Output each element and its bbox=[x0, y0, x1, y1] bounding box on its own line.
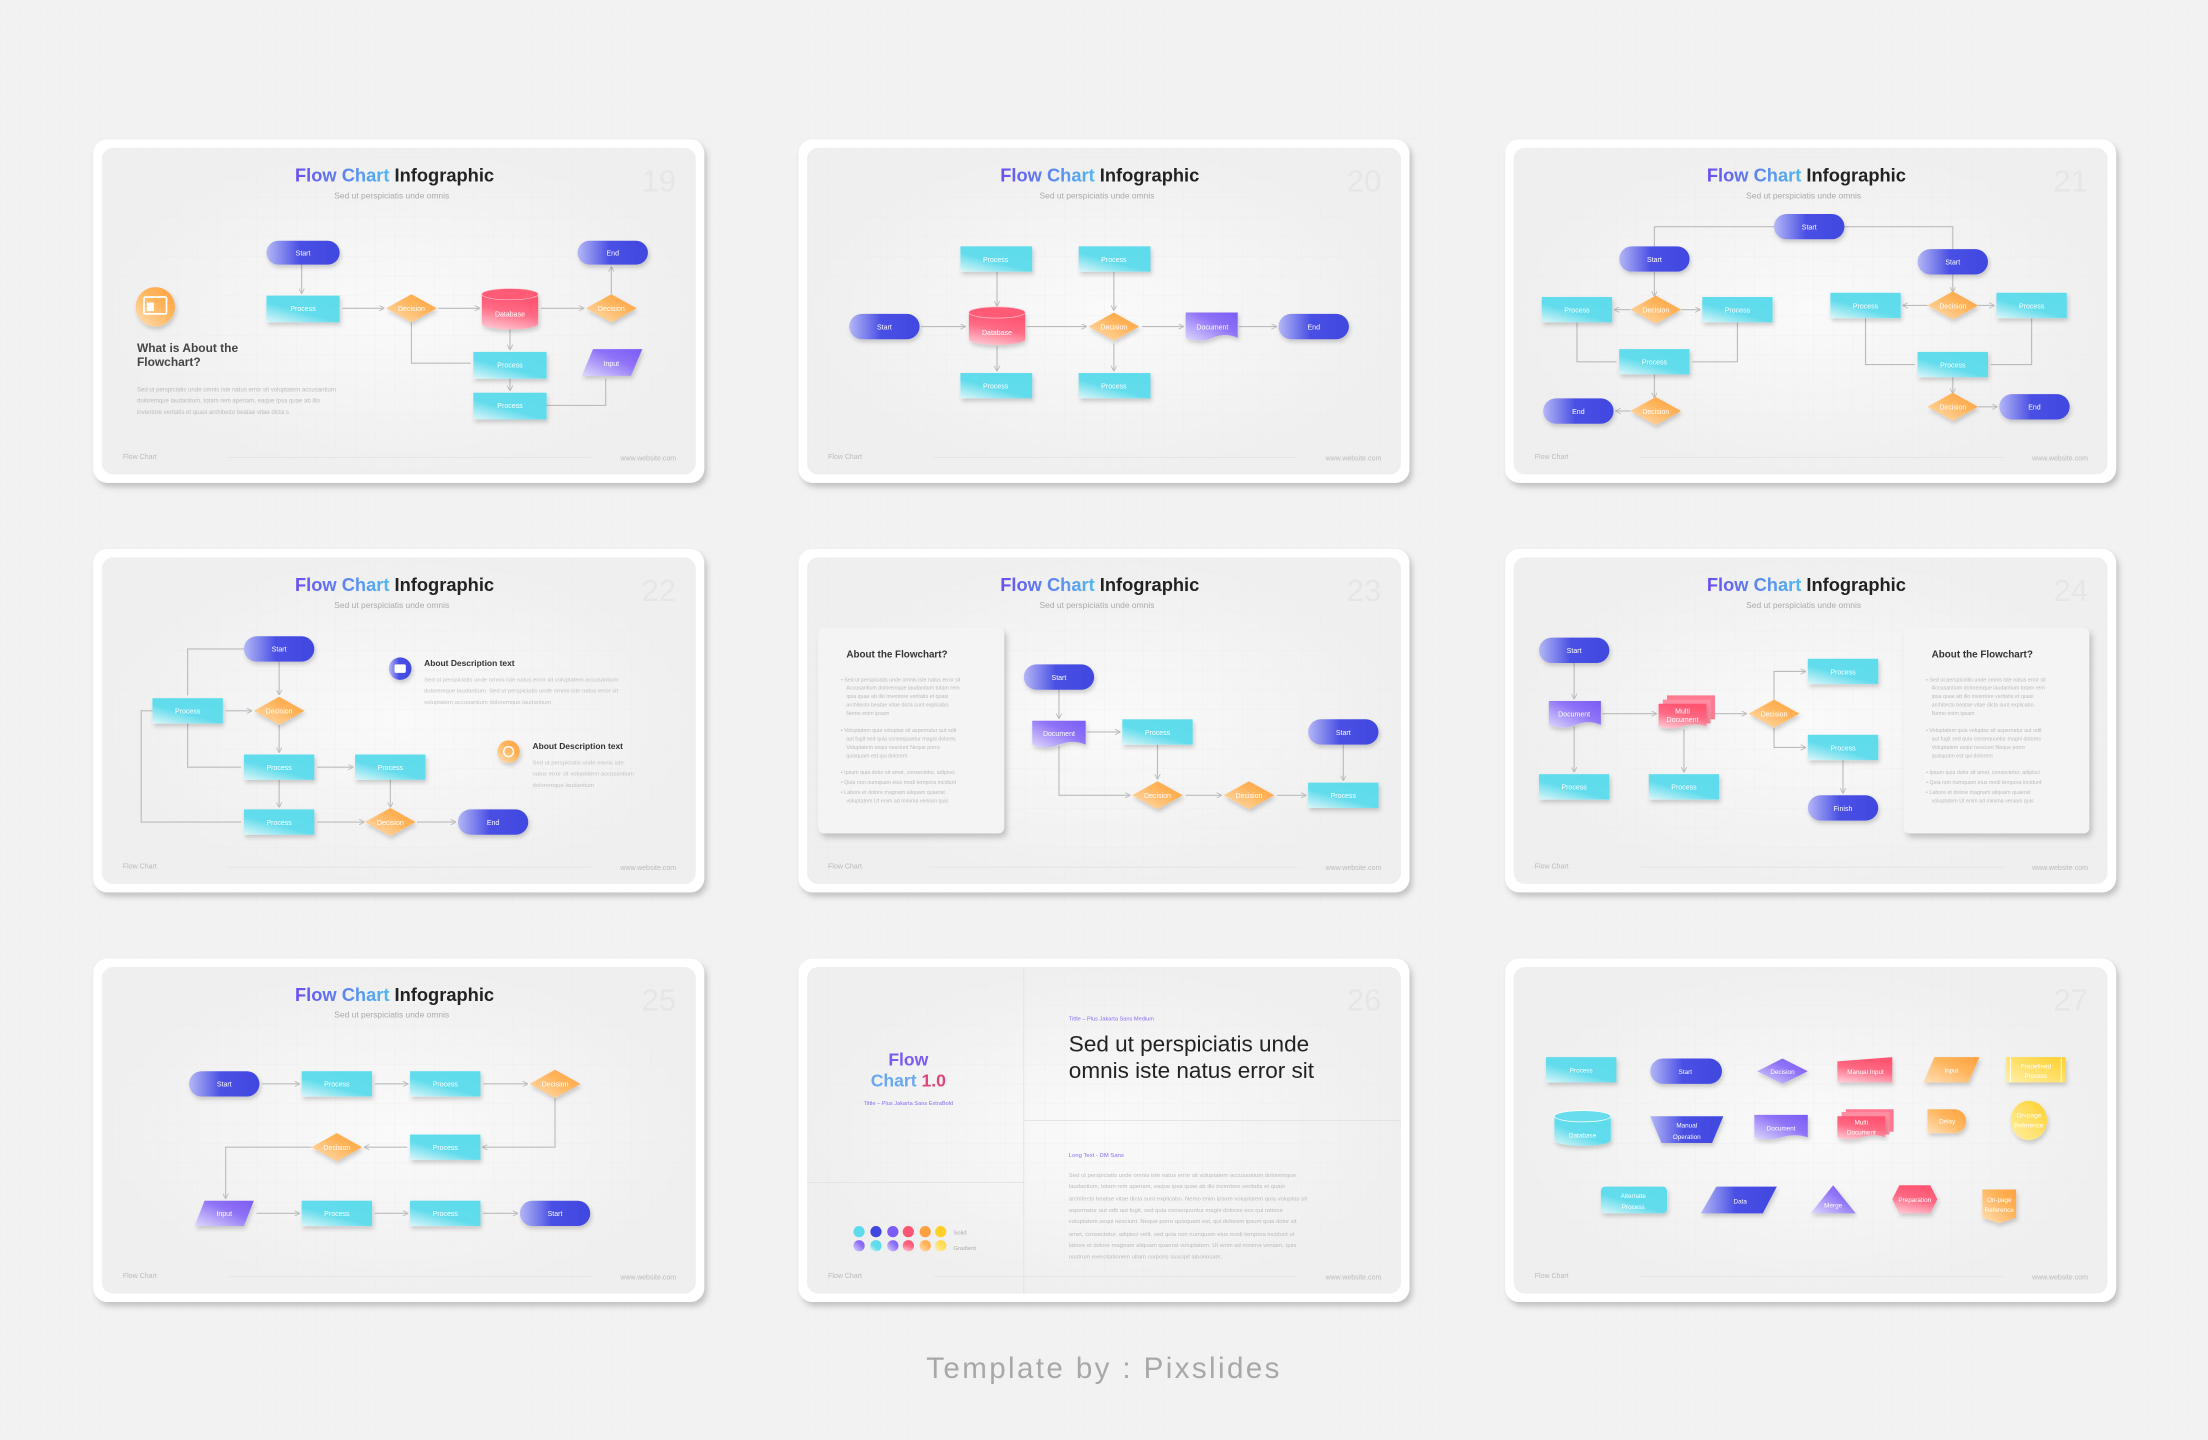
card 21 bbox=[1505, 139, 2116, 483]
panel: about bbox=[1904, 628, 2089, 833]
panel: about: • Sed ut perspiciatis unde omnis iste natus error sit bbox=[841, 677, 961, 683]
card 19: Flowchart? bbox=[137, 355, 201, 369]
panel: about: • Labore et dolore magnam aliquam quaerat bbox=[841, 790, 945, 796]
panel: about: aut fugit sed quia consequuntur magni dolores bbox=[846, 736, 956, 742]
flowchart shapes: Process bbox=[290, 306, 316, 313]
flowchart shapes: Finish bbox=[1834, 806, 1852, 813]
flowchart shapes: Document bbox=[1667, 717, 1699, 724]
body text: doloremque laudantium, totam rem aperiam, eaque ipsa quae ab illo bbox=[137, 399, 320, 405]
title: Flow Chart 1.0: Flow bbox=[888, 1050, 929, 1070]
flowchart shapes: Process bbox=[983, 384, 1009, 391]
shape library: Manual Input bbox=[1847, 1069, 1884, 1076]
panel: about: • Ipsum quia dolor sit amet, consectetur, adipisci bbox=[1926, 770, 2040, 776]
card 25: www.website.com bbox=[619, 1275, 676, 1282]
shape library: Decision bbox=[1770, 1069, 1795, 1076]
card 20: Sed ut perspiciatis unde omnis bbox=[1040, 190, 1154, 200]
flowchart shapes: Decision bbox=[377, 820, 404, 827]
headline: omnis iste natus error sit bbox=[1069, 1058, 1315, 1083]
headline bbox=[1069, 1017, 1315, 1083]
text block: description 1: voluptatem accusantium doloremque laudantium bbox=[424, 700, 551, 706]
panel: about: About the Flowchart? bbox=[1932, 649, 2033, 660]
card 19: Flow Chart bbox=[123, 454, 157, 461]
card 27: www.website.com bbox=[2031, 1275, 2088, 1282]
flowchart shapes: Start bbox=[1802, 224, 1817, 231]
flowchart shapes: Decision bbox=[1236, 793, 1263, 800]
flowchart shapes bbox=[1542, 214, 2070, 425]
body text: amet, consectetur, adipisci velit, sed quia non numquam eius modi tempora incidunt ut bbox=[1069, 1232, 1295, 1238]
text block: description 2: natus error sit voluptatem accusantium bbox=[533, 772, 634, 778]
card 20: www.website.com bbox=[1325, 455, 1381, 462]
flowchart shapes: Decision bbox=[398, 306, 425, 313]
title: Flow Chart 1.0: Tittle – Plus Jakarta Sans ExtraBold bbox=[864, 1101, 953, 1107]
card 22: www.website.com bbox=[619, 865, 676, 872]
flowchart shapes: Document bbox=[1043, 731, 1075, 738]
flowchart shapes: Decision bbox=[598, 306, 625, 313]
title: Flow Chart Infographic bbox=[295, 574, 494, 595]
flowchart shapes: Process bbox=[378, 765, 403, 772]
panel: about: • Quia non numquam eius modi tempora incidunt bbox=[841, 780, 957, 786]
flowchart shapes: Process bbox=[266, 765, 292, 772]
panel: about bbox=[818, 628, 1004, 833]
card 19: 19 bbox=[642, 163, 676, 198]
text block: description 1 bbox=[424, 658, 619, 706]
body text: laudantium, totam rem aperiam, eaque ipsa quae ab illo inventore veritatis et quasi bbox=[1069, 1184, 1285, 1190]
card 21: Flow Chart bbox=[1535, 454, 1569, 461]
shape library: Start bbox=[1679, 1069, 1692, 1076]
body text: nostrum exercitationem ullam corporis suscipit laboriosam, bbox=[1069, 1254, 1222, 1260]
title: Flow Chart Infographic bbox=[295, 984, 494, 1005]
shape library: On-page bbox=[1987, 1197, 2012, 1204]
body text: Sed ut perspiciatis unde omnis iste natus error sit voluptatem accusantium doloremque bbox=[1069, 1173, 1297, 1179]
card 26 bbox=[799, 959, 1409, 1302]
card 27 bbox=[1505, 959, 2116, 1302]
panel: about: architecto beatae vitae dicta sunt explicabo. bbox=[846, 703, 950, 709]
flowchart shapes: Process bbox=[175, 709, 201, 716]
card 19 bbox=[93, 139, 704, 483]
flowchart shapes: Process bbox=[1830, 745, 1856, 752]
color palette: Solid bbox=[953, 1230, 967, 1236]
shape library: Reference bbox=[1985, 1207, 2014, 1214]
icon: blue circle bbox=[389, 657, 411, 680]
text block: description 2 bbox=[533, 741, 634, 789]
flowchart shapes: Decision bbox=[1100, 324, 1127, 331]
flowchart shapes: Start bbox=[1647, 257, 1662, 264]
color palette bbox=[853, 1226, 976, 1252]
card 26: 26 bbox=[1347, 983, 1381, 1018]
title: Flow Chart 1.0: Chart 1.0 bbox=[871, 1071, 946, 1091]
flowchart shapes: Process bbox=[433, 1211, 458, 1218]
flowchart shapes: Process bbox=[1331, 793, 1356, 800]
flowchart shapes: Start bbox=[1945, 260, 1960, 267]
flowchart shapes: End bbox=[1307, 324, 1320, 331]
body text bbox=[137, 387, 336, 416]
text block: description 1: doloremque laudantium. Sed ut perspiciatis unde omnis iste natus error sit bbox=[424, 689, 619, 695]
flowchart shapes bbox=[189, 1070, 590, 1226]
shape library: Reference bbox=[2014, 1123, 2044, 1130]
headline: Tittle – Plus Jakarta Sans Medium bbox=[1069, 1017, 1154, 1023]
card 26: www.website.com bbox=[1325, 1275, 1381, 1282]
connectors bbox=[1574, 663, 1843, 792]
card 25: Flow Chart bbox=[123, 1273, 157, 1280]
headline: Sed ut perspiciatis unde bbox=[1069, 1031, 1309, 1056]
heading: What is About the bbox=[137, 341, 238, 355]
shape library: Document bbox=[1847, 1130, 1876, 1137]
flowchart shapes: Start bbox=[296, 250, 311, 257]
flowchart shapes bbox=[1024, 664, 1378, 809]
card 24: 24 bbox=[2053, 573, 2088, 608]
panel: about: ipsa quae ab illo inventore veritatis et quasi bbox=[1932, 694, 2034, 700]
shape library: Process bbox=[1570, 1068, 1593, 1075]
flowchart shapes: Decision bbox=[266, 709, 293, 716]
flowchart shapes: Process bbox=[1853, 303, 1879, 310]
shape library: Multi bbox=[1855, 1120, 1868, 1127]
flowchart shapes: Process bbox=[324, 1082, 350, 1089]
title: Flow Chart Infographic bbox=[1707, 165, 1906, 186]
shape library: Alternate bbox=[1621, 1193, 1646, 1200]
flowchart shapes: Decision bbox=[1761, 711, 1788, 718]
connectors bbox=[302, 265, 611, 405]
flowchart shapes: End bbox=[606, 250, 619, 257]
flowchart shapes: Process bbox=[324, 1211, 350, 1218]
panel: about: ipsa quae ab illo inventore veritatis et quasi bbox=[846, 694, 948, 700]
flowchart shapes: Input bbox=[216, 1211, 232, 1218]
card 23: 23 bbox=[1347, 573, 1381, 608]
text block: description 2: doloremque laudantium bbox=[533, 783, 594, 789]
flowchart shapes: Process bbox=[1940, 362, 1966, 369]
flowchart shapes: Decision bbox=[1144, 793, 1171, 800]
panel: about: • Voluptatem quia voluptas sit aspernatur aut odit bbox=[841, 728, 957, 734]
flowchart shapes: Process bbox=[433, 1145, 458, 1152]
card 20: Flow Chart bbox=[828, 454, 862, 461]
card 22 bbox=[93, 549, 704, 892]
card 23: Flow Chart bbox=[828, 864, 862, 871]
flowchart shapes: Process bbox=[433, 1082, 458, 1089]
body text: labore et dolore magnam aliquam quaerat voluptatem. Ut enim ad minima veniam, quis bbox=[1069, 1243, 1296, 1249]
flowchart shapes: Process bbox=[983, 257, 1009, 264]
flowchart shapes: Multi bbox=[1675, 709, 1690, 716]
flowchart shapes: Decision bbox=[1642, 409, 1669, 416]
card 22: 22 bbox=[642, 573, 676, 608]
shape library: Delay bbox=[1939, 1118, 1956, 1125]
panel: about: Voluptatem sequi nesciunt Neque porro bbox=[846, 745, 940, 751]
panel: about: Accusantium doloremque laudantium totam rem bbox=[846, 686, 960, 692]
flowchart shapes: Process bbox=[266, 820, 292, 827]
panel: about: architecto beatae vitae dicta sunt explicabo. bbox=[1932, 703, 2035, 709]
flowchart shapes bbox=[152, 636, 528, 836]
connectors bbox=[1577, 227, 2032, 411]
card 21: Sed ut perspiciatis unde omnis bbox=[1746, 190, 1861, 200]
text block: description 1: About Description text bbox=[424, 658, 515, 668]
flowchart shapes: End bbox=[487, 820, 499, 827]
flowchart shapes: Start bbox=[217, 1082, 232, 1089]
flowchart shapes: Process bbox=[1830, 669, 1856, 676]
card 25 bbox=[93, 959, 704, 1302]
shape library: Preparation bbox=[1898, 1197, 1932, 1204]
icon: orange circle bbox=[136, 287, 175, 327]
card 23: www.website.com bbox=[1325, 865, 1381, 872]
flowchart shapes: Document bbox=[1196, 324, 1228, 331]
flowchart shapes: Input bbox=[604, 361, 619, 368]
shape library: Input bbox=[1944, 1068, 1959, 1075]
title: Flow Chart Infographic bbox=[1000, 574, 1199, 595]
panel: about: About the Flowchart? bbox=[846, 649, 948, 660]
shape library: Document bbox=[1767, 1125, 1796, 1132]
shape library: On-page bbox=[2016, 1113, 2042, 1120]
flowchart shapes: End bbox=[2028, 405, 2041, 412]
flowchart shapes: Start bbox=[1052, 675, 1066, 682]
panel: about: Voluptatem sequi nesciunt Neque porro bbox=[1932, 745, 2025, 751]
panel: about: • Labore et dolore magnam aliquam quaerat bbox=[1926, 790, 2031, 796]
flowchart shapes: Process bbox=[1642, 360, 1668, 367]
shape library: Manual bbox=[1676, 1123, 1697, 1130]
title: Flow Chart Infographic bbox=[295, 165, 494, 186]
panel: about: quisquam est qui dolorem bbox=[846, 753, 908, 759]
body text: architecto beatae vitae dicta sunt explicabo. Nemo enim ipsam voluptatem quia voluptas sit bbox=[1069, 1197, 1308, 1203]
panel: about: Nemo enim ipsam bbox=[1932, 711, 1975, 717]
card 25: Sed ut perspiciatis unde omnis bbox=[334, 1010, 449, 1020]
flowchart shapes: Decision bbox=[1642, 307, 1669, 314]
card 25: 25 bbox=[642, 983, 676, 1018]
body text bbox=[1069, 1153, 1308, 1260]
flowchart shapes: Process bbox=[1564, 307, 1590, 314]
card 19: Sed ut perspiciatis unde omnis bbox=[334, 190, 449, 200]
shape library: Process bbox=[2024, 1073, 2047, 1080]
title: Flow Chart 1.0 bbox=[864, 1050, 953, 1107]
flowchart shapes: Database bbox=[982, 330, 1012, 337]
connectors bbox=[226, 1084, 555, 1213]
body text: aspernatur aut odit aut fugit, sed quia consequuntur magni dolores eos qui ratione bbox=[1069, 1208, 1284, 1214]
card 26: Flow Chart bbox=[828, 1273, 862, 1280]
card 20: 20 bbox=[1347, 163, 1381, 198]
shape library: Process bbox=[1622, 1204, 1645, 1211]
flowchart shapes: Process bbox=[497, 403, 523, 410]
flowchart shapes: Process bbox=[1101, 384, 1127, 391]
text block: description 2: Sed ut perspiciatis unde omnis iste bbox=[533, 760, 624, 766]
flowchart shapes: Start bbox=[1336, 730, 1351, 737]
shape library: Data bbox=[1734, 1199, 1747, 1206]
flowchart shapes: Process bbox=[1671, 785, 1697, 792]
shape library bbox=[1546, 1057, 2065, 1223]
card 21: www.website.com bbox=[2031, 455, 2088, 462]
flowchart shapes: Process bbox=[2019, 303, 2045, 310]
body text: Long Text - DM Sans bbox=[1069, 1153, 1124, 1159]
flowchart shapes: Document bbox=[1558, 711, 1590, 718]
flowchart shapes: Database bbox=[495, 312, 525, 319]
card 23: Sed ut perspiciatis unde omnis bbox=[1040, 600, 1154, 610]
body text: inventore veritatis et quasi architecto beatae vitae dicta s bbox=[137, 410, 289, 416]
title: Flow Chart Infographic bbox=[1707, 574, 1906, 595]
body text: voluptatem sequi nesciunt. Neque porro quisquam est, qui dolorem ipsum quia dolor sit bbox=[1069, 1219, 1297, 1225]
panel: about: quisquam est qui dolorem bbox=[1932, 753, 1993, 759]
body text: Sed ut perspiciatis unde omnis iste natus error sit voluptatem accusantium bbox=[137, 387, 336, 393]
flowchart shapes: Decision bbox=[1939, 303, 1966, 310]
card 24: www.website.com bbox=[2031, 865, 2088, 872]
panel: about: • Ipsum quia dolor sit amet, consectetur, adipisci bbox=[841, 770, 955, 776]
title: Flow Chart Infographic bbox=[1000, 165, 1199, 186]
shape library: Predefined bbox=[2021, 1063, 2052, 1070]
flowchart shapes: End bbox=[1572, 409, 1585, 416]
card 23 bbox=[799, 549, 1409, 892]
card 27: Flow Chart bbox=[1535, 1273, 1569, 1280]
color palette: Gradient bbox=[953, 1246, 976, 1252]
flowchart shapes: Process bbox=[497, 362, 523, 369]
panel: about: • Voluptatem quia voluptas sit aspernatur aut odit bbox=[1926, 728, 2042, 734]
panel: about: • Quia non numquam eius modi tempora incidunt bbox=[1926, 780, 2042, 786]
panel: about: voluptatem Ut enim ad minima veniam quis bbox=[846, 798, 949, 804]
flowchart shapes: Start bbox=[548, 1211, 562, 1218]
flowchart shapes: Process bbox=[1725, 307, 1751, 314]
footer credit: Template by : Pixslides bbox=[926, 1352, 1282, 1385]
flowchart shapes: Start bbox=[1567, 648, 1582, 655]
connectors bbox=[141, 649, 455, 822]
card 24: Sed ut perspiciatis unde omnis bbox=[1746, 600, 1861, 610]
flowchart shapes: Decision bbox=[542, 1082, 569, 1089]
flowchart shapes: Decision bbox=[1939, 405, 1966, 412]
flowchart shapes: Process bbox=[1561, 785, 1587, 792]
panel: about: voluptatem Ut enim ad minima veniam quis bbox=[1932, 798, 2034, 804]
panel: about: aut fugit sed quia consequuntur magni dolores bbox=[1932, 736, 2041, 742]
connectors bbox=[1059, 690, 1343, 795]
panel: about: • Sed ut perspiciatis unde omnis iste natus error sit bbox=[1926, 677, 2046, 683]
flowchart shapes: Process bbox=[1101, 257, 1127, 264]
card 24: Flow Chart bbox=[1535, 864, 1569, 871]
shape library: Merge bbox=[1824, 1203, 1843, 1210]
panel: about: Accusantium doloremque laudantium totam rem bbox=[1932, 686, 2045, 692]
card 20 bbox=[799, 139, 1409, 483]
flowchart shapes: Process bbox=[1145, 730, 1171, 737]
card 27: 27 bbox=[2053, 983, 2088, 1018]
card 22: Sed ut perspiciatis unde omnis bbox=[334, 600, 449, 610]
text block: description 2: About Description text bbox=[533, 741, 623, 751]
flowchart shapes bbox=[266, 241, 648, 419]
card 22: Flow Chart bbox=[123, 864, 157, 871]
flowchart shapes: Decision bbox=[323, 1145, 350, 1152]
icon: orange circle bbox=[497, 740, 520, 763]
shape library: Database bbox=[1569, 1132, 1597, 1139]
text block: description 1: Sed ut perspiciatis unde omnis iste natus error sit voluptatem accusantium bbox=[424, 677, 619, 683]
connectors bbox=[921, 272, 1276, 370]
shape library: Operation bbox=[1673, 1134, 1701, 1141]
flowchart shapes bbox=[1539, 638, 1878, 821]
flowchart shapes: Start bbox=[272, 647, 287, 654]
card 24 bbox=[1505, 549, 2116, 892]
flowchart shapes bbox=[849, 246, 1349, 398]
panel: about: Nemo enim ipsam bbox=[846, 711, 890, 717]
card 21: 21 bbox=[2053, 163, 2088, 198]
flowchart shapes: Start bbox=[877, 324, 892, 331]
card 19: www.website.com bbox=[619, 455, 676, 462]
